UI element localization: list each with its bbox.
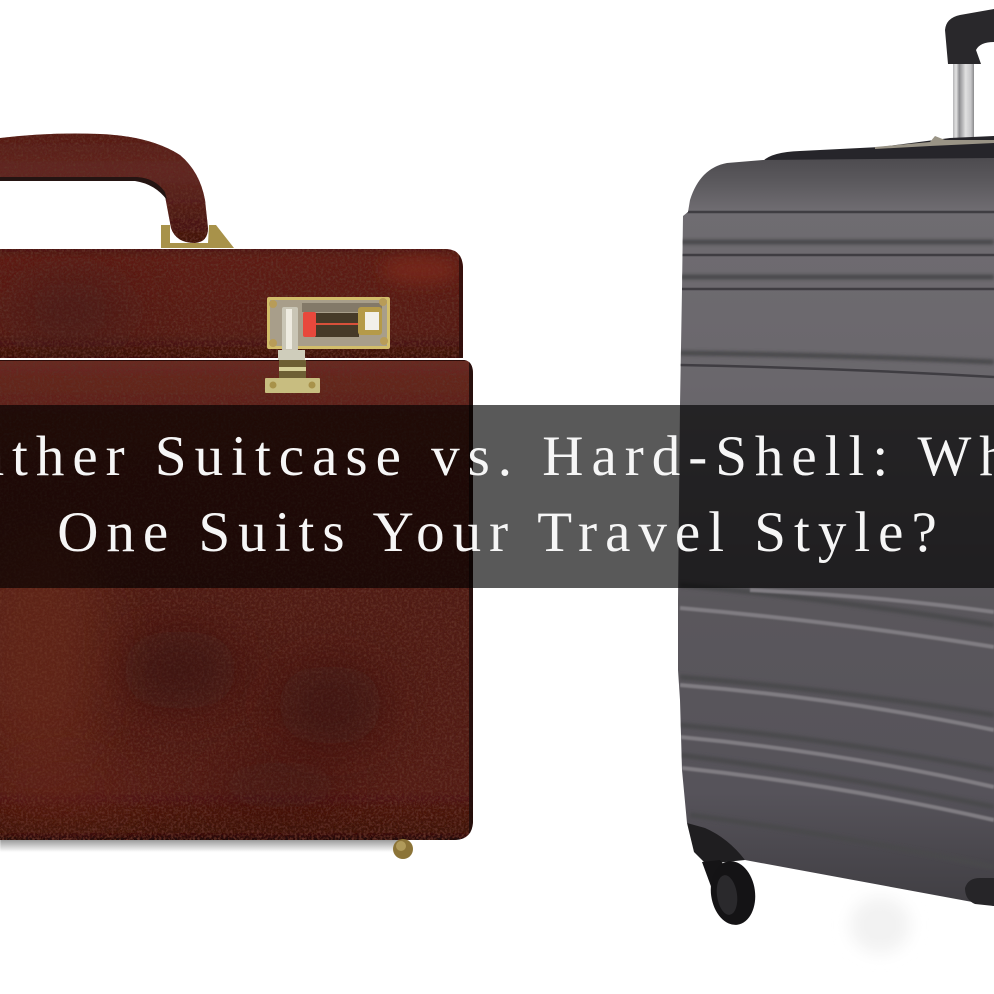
icon: suitcase handle [0, 134, 208, 243]
icon: handle bracket [161, 225, 234, 248]
title text [0, 425, 994, 564]
suitcase body [0, 358, 474, 840]
icon: right wheel [965, 878, 994, 906]
shell body [678, 158, 994, 906]
icon: brass foot [393, 839, 413, 859]
title line 2: One Suits Your Travel Style? [57, 501, 945, 564]
shell ridges [680, 212, 994, 867]
suitcase lid [0, 249, 464, 360]
leather suitcase [0, 134, 474, 859]
floor shadows [0, 838, 910, 953]
icon: telescopic pull handle [945, 9, 994, 138]
icon: wheel [687, 823, 759, 928]
shell top edge [763, 136, 994, 162]
hard-shell suitcase [678, 9, 994, 928]
title band [0, 405, 994, 588]
icon: combination lock [265, 297, 390, 393]
